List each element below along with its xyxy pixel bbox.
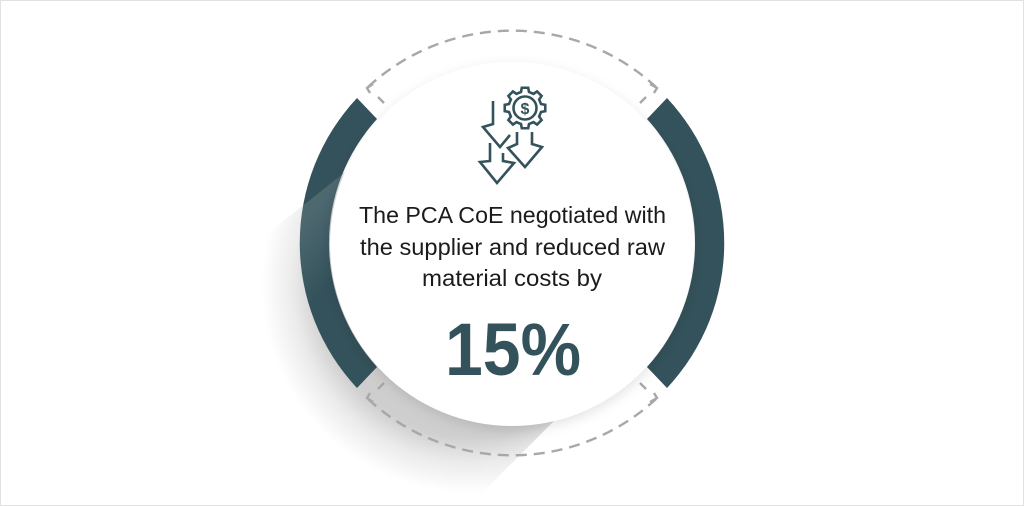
icon part: second arrow bbox=[508, 132, 542, 167]
dashed ring: top arc bbox=[367, 31, 657, 103]
right ring segment bbox=[647, 98, 724, 388]
body text bbox=[359, 202, 666, 291]
icon part: third arrow bbox=[480, 143, 514, 183]
long drop shadow bbox=[275, 172, 554, 480]
key figure: 15%: 15% bbox=[445, 308, 581, 391]
left ring segment bbox=[300, 98, 377, 388]
dashed ring: bottom arc bbox=[367, 383, 657, 455]
white center circle bbox=[330, 62, 694, 426]
body text: the supplier and reduced raw bbox=[360, 234, 666, 260]
icon part: gear: $ bbox=[521, 101, 530, 118]
body text: material costs by bbox=[422, 265, 602, 291]
icon: gear with dollar and down arrows bbox=[480, 88, 545, 183]
body text: The PCA CoE negotiated with bbox=[359, 202, 666, 228]
icon part: first arrow bbox=[483, 101, 510, 147]
